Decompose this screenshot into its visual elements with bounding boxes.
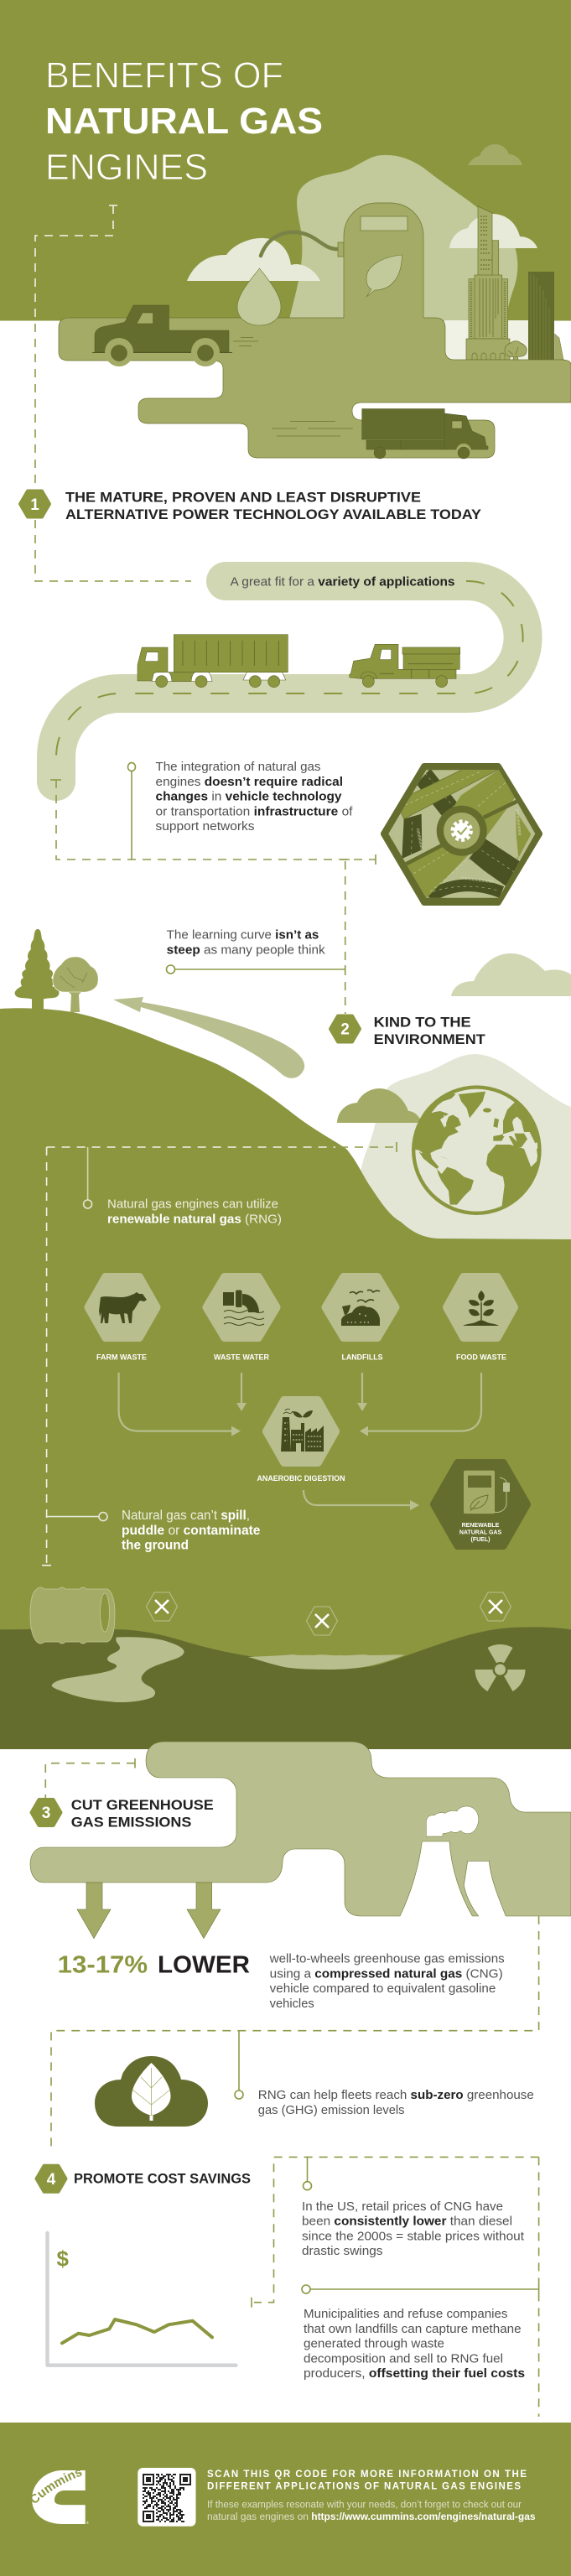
section 2 heading [374, 1015, 485, 1047]
curved arrow [113, 997, 304, 1078]
logo: Cummins: Cummins [32, 2470, 82, 2503]
gas drop [237, 268, 281, 325]
process: landfills: LANDFILLS [342, 1353, 382, 1362]
text: integration: The integration of natural gas [156, 761, 320, 774]
text: renewable natural gas [107, 1198, 282, 1226]
dashed connector: section 3 to 4 [51, 1916, 539, 2152]
winding road [56, 581, 523, 782]
text: landfill methane: decomposition and sell to RNG fuel [304, 2352, 503, 2366]
section 3 heading: CUT GREENHOUSE [71, 1798, 214, 1813]
text: landfill methane [304, 2308, 525, 2381]
title: ENGINES [45, 147, 208, 188]
section 1 badge: 1 [30, 496, 39, 514]
section 1 heading: THE MATURE, PROVEN AND LEAST DISRUPTIVE [65, 491, 421, 506]
small tree [505, 341, 527, 360]
dark block building [528, 272, 563, 360]
fuel pump [338, 203, 423, 319]
oil barrel [30, 1587, 115, 1644]
hexagon icon: highway interchange with gear [381, 763, 543, 906]
icon: waste pipe [223, 1290, 264, 1325]
text: well-to-wheels: using a compressed natural gas (CNG) [270, 1967, 503, 1981]
section 2 badge: 2 [340, 1021, 350, 1038]
process: farm waste [89, 1277, 156, 1362]
section 3 heading: GAS EMISSIONS [71, 1815, 191, 1831]
oil spill [52, 1637, 184, 1702]
process: renewable natural gas fuel: (FUEL) [471, 1537, 490, 1543]
text: landfill methane: generated through waste [304, 2338, 444, 2351]
footer text: natural gas engines on https://www.cummins.com/engines/natural-gas [207, 2512, 535, 2522]
icon: factory [281, 1409, 324, 1452]
title: BENEFITS OF [45, 55, 283, 96]
stat: 13-17% lower: LOWER [158, 1952, 250, 1979]
text: no spills: the ground [122, 1539, 189, 1553]
text: no spills: Natural gas can’t spill, [122, 1509, 250, 1523]
conifer tree [15, 929, 60, 1010]
section 1 heading: ALTERNATIVE POWER TECHNOLOGY AVAILABLE TODAY [65, 507, 481, 522]
footer background [0, 2423, 571, 2576]
section 2 heading: KIND TO THE [374, 1015, 471, 1030]
section 1 badge [20, 491, 49, 517]
down arrow 1 [77, 1883, 111, 1939]
text: learning curve [167, 928, 325, 957]
section 3 heading [71, 1798, 214, 1831]
mountain backdrop [359, 1054, 571, 1241]
dashed connector: globe to section 2 text [42, 1142, 397, 1566]
power plant silhouette [30, 1742, 571, 1916]
connector: power plant to section 3 [45, 1758, 135, 1800]
flow arrow to RNG fuel [304, 1490, 419, 1510]
text: CNG prices: drastic swings [302, 2245, 382, 2258]
footer heading [207, 2470, 527, 2491]
hose [261, 232, 337, 256]
process: waste water [206, 1277, 277, 1362]
tower building [466, 206, 510, 360]
callout line: learning curve [166, 965, 345, 974]
section 4 badge [37, 2166, 65, 2192]
flow arrows into digestion [119, 1373, 481, 1436]
illustration: fuelling station scene [59, 144, 571, 459]
section 4 badge: 4 [47, 2171, 56, 2189]
dark soil band [0, 1627, 571, 1749]
text: integration: or transportation infrastructure of [156, 805, 354, 818]
text: integration: changes in vehicle technology [156, 791, 342, 804]
title: NATURAL GAS [45, 101, 323, 142]
process: food waste: FOOD WASTE [456, 1353, 506, 1362]
box truck [272, 409, 488, 459]
text: CNG prices [302, 2200, 524, 2258]
process: landfills [325, 1277, 396, 1362]
text: landfill methane: producers, offsetting their fuel costs [304, 2367, 525, 2381]
icon: cross 2 [307, 1607, 337, 1635]
icon: leaf cloud [95, 2056, 208, 2127]
callout line: no spills [47, 1513, 107, 1521]
icon: cross 3 [480, 1592, 511, 1621]
text: well-to-wheels: well-to-wheels greenhouse gas emissions [269, 1953, 505, 1966]
text: no spills [122, 1509, 261, 1553]
line chart: $ [57, 2246, 69, 2272]
puddle [248, 1654, 405, 1670]
process: renewable natural gas fuel: RENEWABLE [462, 1523, 500, 1529]
process: renewable natural gas fuel [434, 1463, 527, 1545]
big container truck [138, 635, 288, 688]
text: integration: support networks [156, 820, 255, 834]
pickup truck [92, 305, 258, 366]
process: food waste [447, 1277, 514, 1362]
icon: globe [412, 1085, 547, 1215]
process: anaerobic digestion [257, 1400, 345, 1483]
process: farm waste: FARM WASTE [96, 1353, 147, 1362]
section 2 heading: ENVIRONMENT [374, 1032, 485, 1047]
small dump truck [350, 644, 460, 688]
text: learning curve: steep as many people think [167, 943, 325, 957]
line chart [47, 2233, 236, 2366]
text: CNG prices: In the US, retail prices of CNG have [302, 2200, 503, 2214]
stat: 13-17% lower [58, 1952, 250, 1979]
text: landfill methane: that own landfills can capture methane [304, 2323, 522, 2336]
connectors: road to section 2 [50, 763, 376, 1014]
section 3 badge [32, 1800, 60, 1826]
text: no spills: puddle or contaminate [122, 1524, 261, 1538]
QR code [138, 2468, 196, 2527]
logo: Cummins [32, 2470, 89, 2525]
text: learning curve: The learning curve isn’t as [167, 928, 319, 942]
text: renewable natural gas: Natural gas engines can utilize [107, 1198, 278, 1212]
text: sub-zero: RNG can help fleets reach sub-zero greenhouse [258, 2089, 534, 2102]
ground shape [59, 318, 571, 458]
icon: plant [463, 1291, 499, 1326]
header background [0, 0, 571, 320]
footer text [207, 2501, 535, 2522]
text: well-to-wheels [269, 1953, 505, 2011]
title [45, 55, 323, 188]
text: CNG prices: since the 2000s = stable prices without [302, 2230, 524, 2243]
footer heading: SCAN THIS QR CODE FOR MORE INFORMATION ON THE [207, 2470, 527, 2480]
process: waste water: WASTE WATER [214, 1353, 269, 1362]
text: sub-zero [258, 2089, 534, 2117]
footer text: If these examples resonate with your needs, don’t forget to check out our [207, 2501, 522, 2511]
text: CNG prices: been consistently lower than diesel [302, 2215, 512, 2229]
text: sub-zero: gas (GHG) emission levels [258, 2104, 404, 2117]
section 1 heading [65, 491, 481, 522]
icon: radiation [472, 1644, 528, 1693]
footer heading: DIFFERENT APPLICATIONS OF NATURAL GAS ENGINES [207, 2481, 521, 2491]
text: landfill methane: Municipalities and refuse companies [304, 2308, 508, 2321]
text: renewable natural gas: renewable natural gas (RNG) [107, 1213, 282, 1226]
down arrow 2 [187, 1883, 221, 1939]
section 2 badge [330, 1016, 360, 1041]
icon: cross 1 [146, 1592, 178, 1621]
process: renewable natural gas fuel: NATURAL GAS [459, 1530, 501, 1536]
icon: cow [99, 1292, 147, 1323]
process: anaerobic digestion: ANAEROBIC DIGESTION [257, 1474, 345, 1483]
section 4 heading: PROMOTE COST SAVINGS [74, 2171, 251, 2186]
logo: Cummins: ® [86, 2521, 89, 2525]
dashed connector: title to section 1 [35, 205, 191, 581]
stat: 13-17% lower: 13-17% [58, 1952, 148, 1979]
text: integration [156, 761, 354, 834]
text: integration: engines doesn’t require radical [156, 776, 343, 789]
hill with section 2 background [0, 1008, 571, 1749]
cloud small [337, 1088, 423, 1123]
text: well-to-wheels: vehicles [270, 1997, 314, 2011]
cloud [451, 953, 571, 996]
text: variety of applications: A great fit for a variety of applications [230, 576, 454, 589]
text: well-to-wheels: vehicle compared to equivalent gasoline [270, 1982, 496, 1996]
broad-leaf tree [53, 957, 98, 1012]
icon: RNG pump [464, 1471, 510, 1514]
icon: landfill mound [341, 1290, 380, 1326]
dashed box: section 4 text [252, 2157, 539, 2417]
section 3 badge: 3 [42, 1805, 50, 1822]
